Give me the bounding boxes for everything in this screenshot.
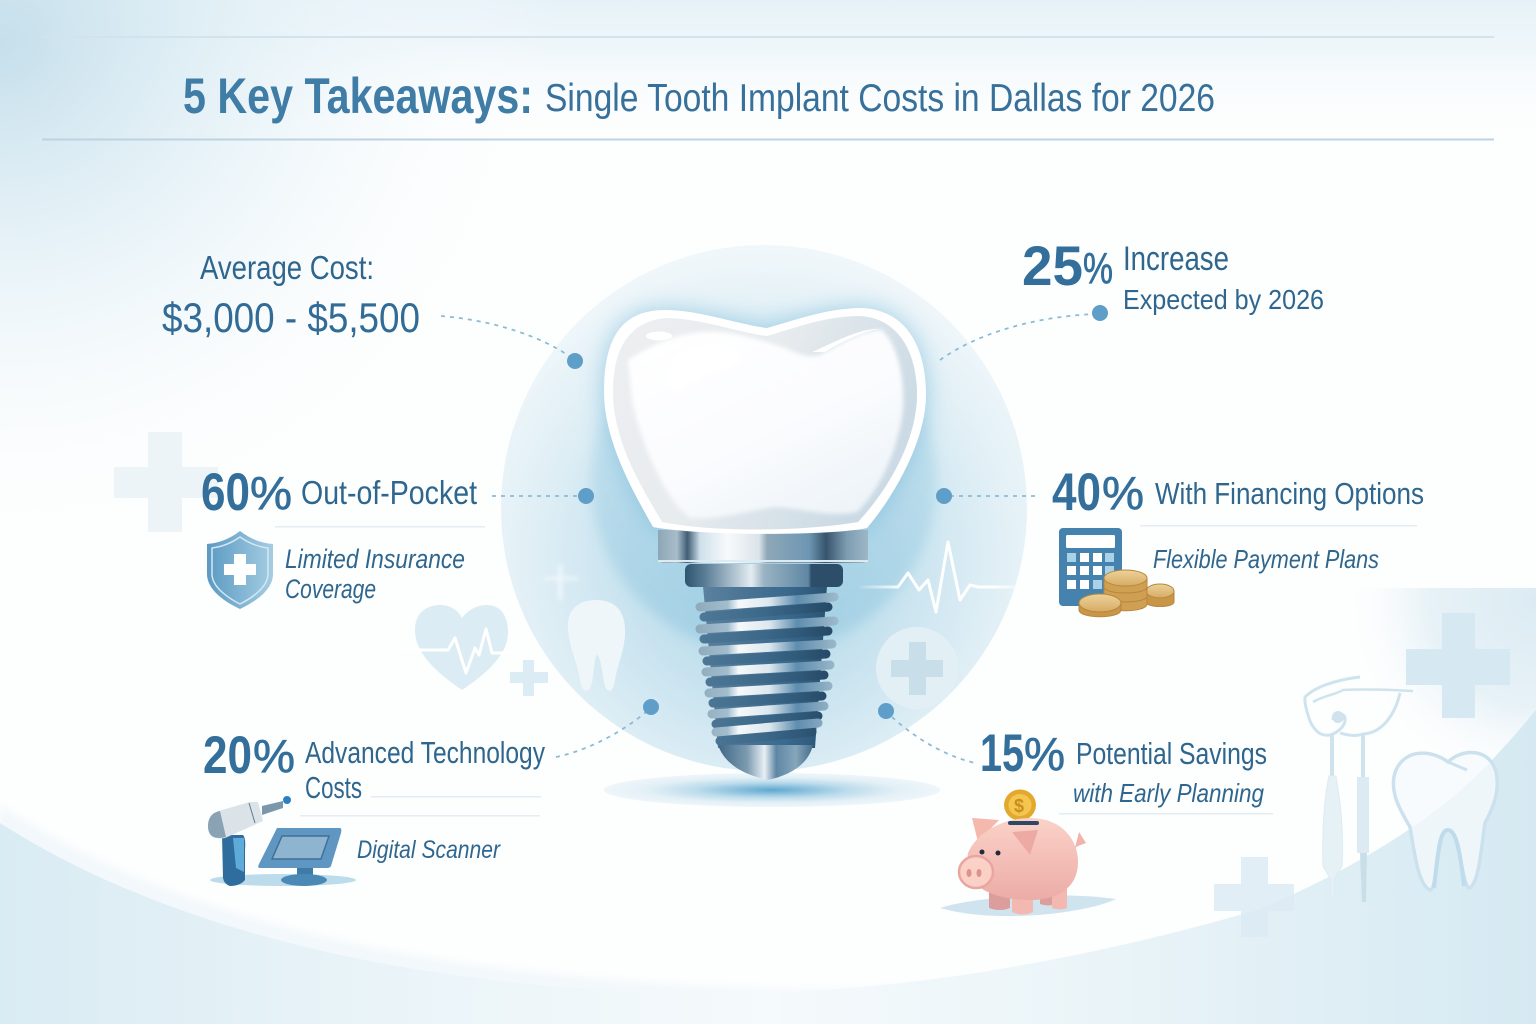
60 percent out of pocket: Limited Insurance bbox=[285, 544, 465, 574]
faded tooth outline bbox=[1393, 753, 1497, 890]
20 percent technology: % bbox=[253, 730, 295, 782]
15 percent savings: % bbox=[1024, 728, 1065, 780]
ground shadow bbox=[604, 773, 940, 807]
inner glow disc bbox=[591, 307, 937, 653]
25 percent increase: % bbox=[1083, 244, 1113, 293]
20 percent technology: 20 bbox=[203, 726, 252, 785]
25 percent increase: 25 bbox=[1022, 234, 1083, 297]
40 percent financing: 40 bbox=[1052, 463, 1101, 522]
faded sparkle plus bbox=[544, 565, 578, 600]
average cost: $3,000 - $5,500 bbox=[162, 294, 420, 341]
faded icon: plus in circle bbox=[876, 627, 958, 709]
40 percent financing: % bbox=[1102, 467, 1144, 519]
60 percent out of pocket: Coverage bbox=[285, 574, 376, 604]
tooth crown bbox=[604, 308, 926, 534]
connector: 40 percent bbox=[936, 488, 1036, 504]
15 percent savings: with Early Planning bbox=[1073, 778, 1264, 808]
pulse line bbox=[860, 542, 1035, 612]
25 percent increase: Increase bbox=[1123, 240, 1229, 278]
title: Single Tooth Implant Costs in Dallas for 2026 bbox=[545, 77, 1215, 120]
20 percent technology bbox=[203, 726, 545, 864]
60 percent out of pocket: % bbox=[250, 467, 292, 519]
faded dental tools bbox=[1305, 677, 1413, 902]
implant threads bbox=[700, 597, 834, 741]
connector: 60 percent bbox=[492, 488, 594, 504]
connector: average cost bbox=[441, 316, 583, 369]
faded small plus bbox=[510, 660, 548, 696]
20 percent technology: Digital Scanner bbox=[357, 836, 501, 864]
15 percent savings bbox=[980, 724, 1273, 814]
40 percent financing: Flexible Payment Plans bbox=[1153, 544, 1379, 574]
average cost: Average Cost: bbox=[200, 249, 374, 286]
15 percent savings: Potential Savings bbox=[1076, 736, 1267, 771]
faded background crosses bbox=[114, 432, 1510, 937]
icon: piggy bank bbox=[940, 790, 1116, 916]
title: 5 Key Takeaways: bbox=[183, 68, 533, 124]
connector: 25 percent bbox=[940, 305, 1108, 360]
implant shaft bbox=[703, 586, 827, 748]
central implant bbox=[604, 308, 940, 807]
40 percent financing: With Financing Options bbox=[1155, 476, 1424, 511]
header rule bottom bbox=[42, 138, 1494, 140]
header rule top bbox=[42, 36, 1494, 38]
60 percent out of pocket bbox=[201, 463, 485, 604]
60 percent out of pocket: 60 bbox=[201, 463, 250, 522]
faded tooth bbox=[568, 600, 625, 691]
25 percent increase: Expected by 2026 bbox=[1123, 284, 1324, 315]
icon: digital scanner bbox=[208, 796, 356, 886]
title bbox=[183, 68, 1215, 124]
20 percent technology: Advanced Technology bbox=[305, 735, 545, 770]
40 percent financing bbox=[1052, 463, 1424, 574]
connector: 15 percent bbox=[878, 703, 975, 763]
25 percent increase bbox=[1022, 234, 1324, 315]
implant collar bbox=[658, 530, 868, 563]
icon: insurance shield bbox=[207, 531, 273, 609]
implant tip bbox=[718, 745, 813, 780]
faded heart with pulse bbox=[360, 605, 540, 690]
connector: 20 percent bbox=[556, 699, 659, 757]
implant abutment neck bbox=[685, 564, 843, 587]
15 percent savings: 15 bbox=[980, 724, 1024, 783]
20 percent technology: Costs bbox=[305, 770, 362, 805]
glow circle bbox=[501, 245, 1027, 771]
60 percent out of pocket: Out-of-Pocket bbox=[301, 474, 477, 511]
icon: piggy bank: $ bbox=[1014, 796, 1024, 816]
crown glow bbox=[604, 308, 926, 534]
icon: calculator and coins bbox=[1059, 528, 1174, 617]
average cost bbox=[162, 249, 420, 341]
